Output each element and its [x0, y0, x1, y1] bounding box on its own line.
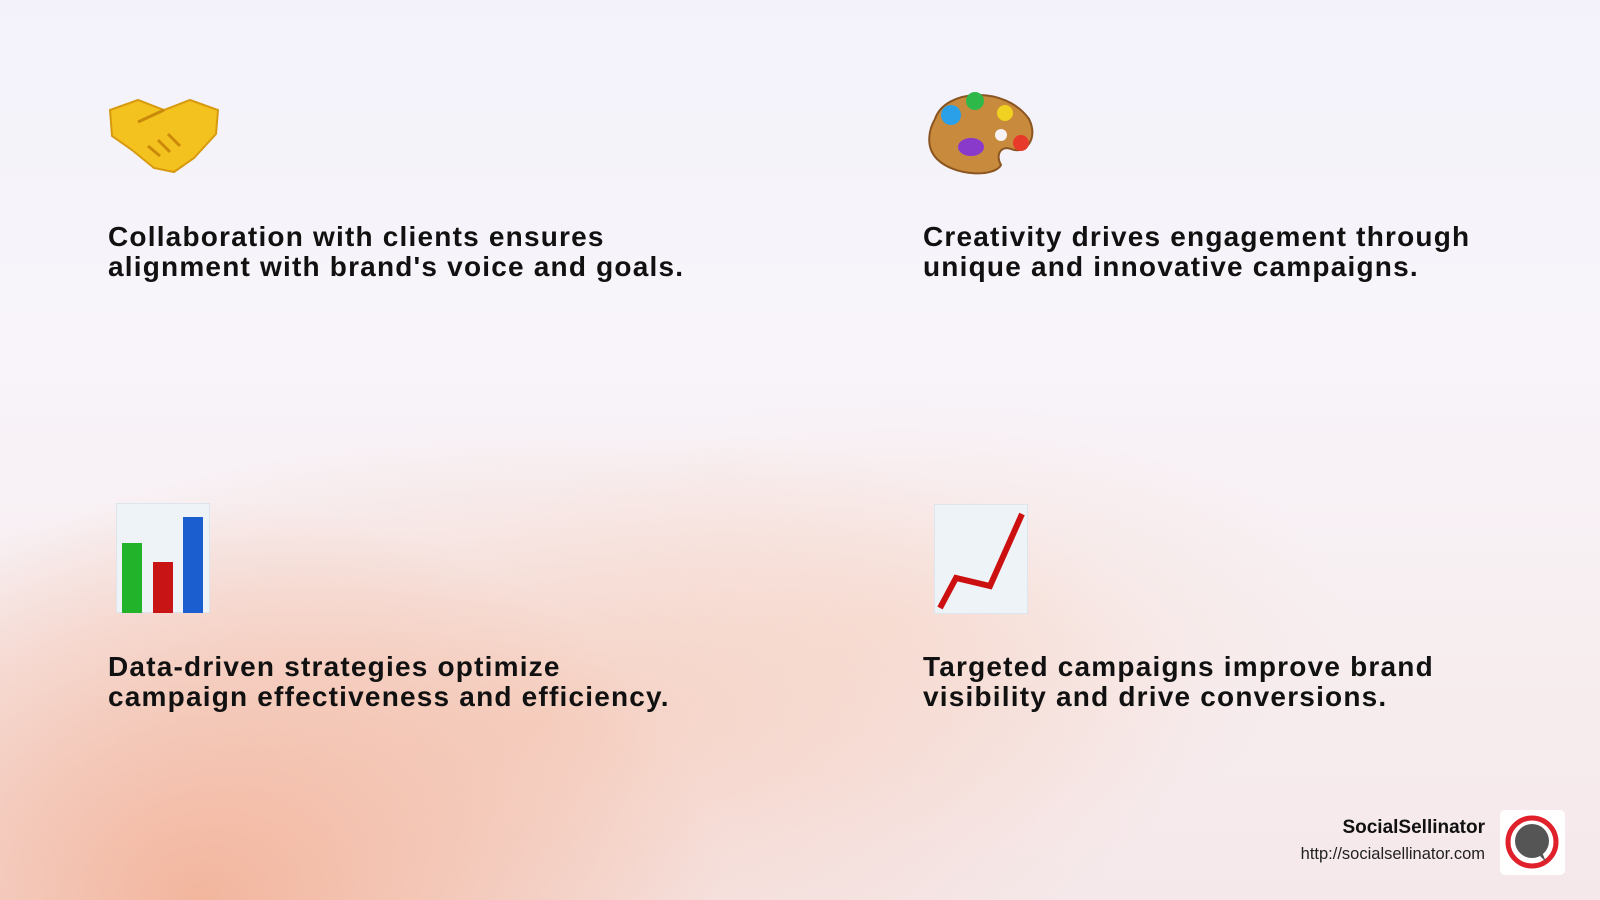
- icon: trend chart: [934, 504, 1028, 614]
- text: data-driven: campaign effectiveness and efficiency.: [108, 681, 670, 712]
- icon: bar chart: [116, 503, 210, 613]
- text: targeted: visibility and drive conversions.: [923, 681, 1387, 712]
- icon: palette: [928, 92, 1034, 174]
- brand name: SocialSellinator: [1342, 817, 1485, 838]
- text: collaboration: Collaboration with clients ensures: [108, 221, 605, 252]
- text: targeted: [923, 651, 1434, 712]
- text: creativity: [923, 221, 1470, 282]
- brand url: http://socialsellinator.com: [1301, 845, 1485, 863]
- text: collaboration: [108, 221, 684, 282]
- brand block: [1301, 810, 1565, 875]
- text: creativity: unique and innovative campaigns.: [923, 251, 1419, 282]
- text: collaboration: alignment with brand's voice and goals.: [108, 251, 684, 282]
- text: data-driven: [108, 651, 670, 712]
- text: targeted: Targeted campaigns improve brand: [923, 651, 1434, 682]
- text: data-driven: Data-driven strategies optimize: [108, 651, 561, 682]
- icon: handshake: [108, 98, 220, 174]
- logo: [1500, 810, 1565, 875]
- text: creativity: Creativity drives engagement through: [923, 221, 1470, 252]
